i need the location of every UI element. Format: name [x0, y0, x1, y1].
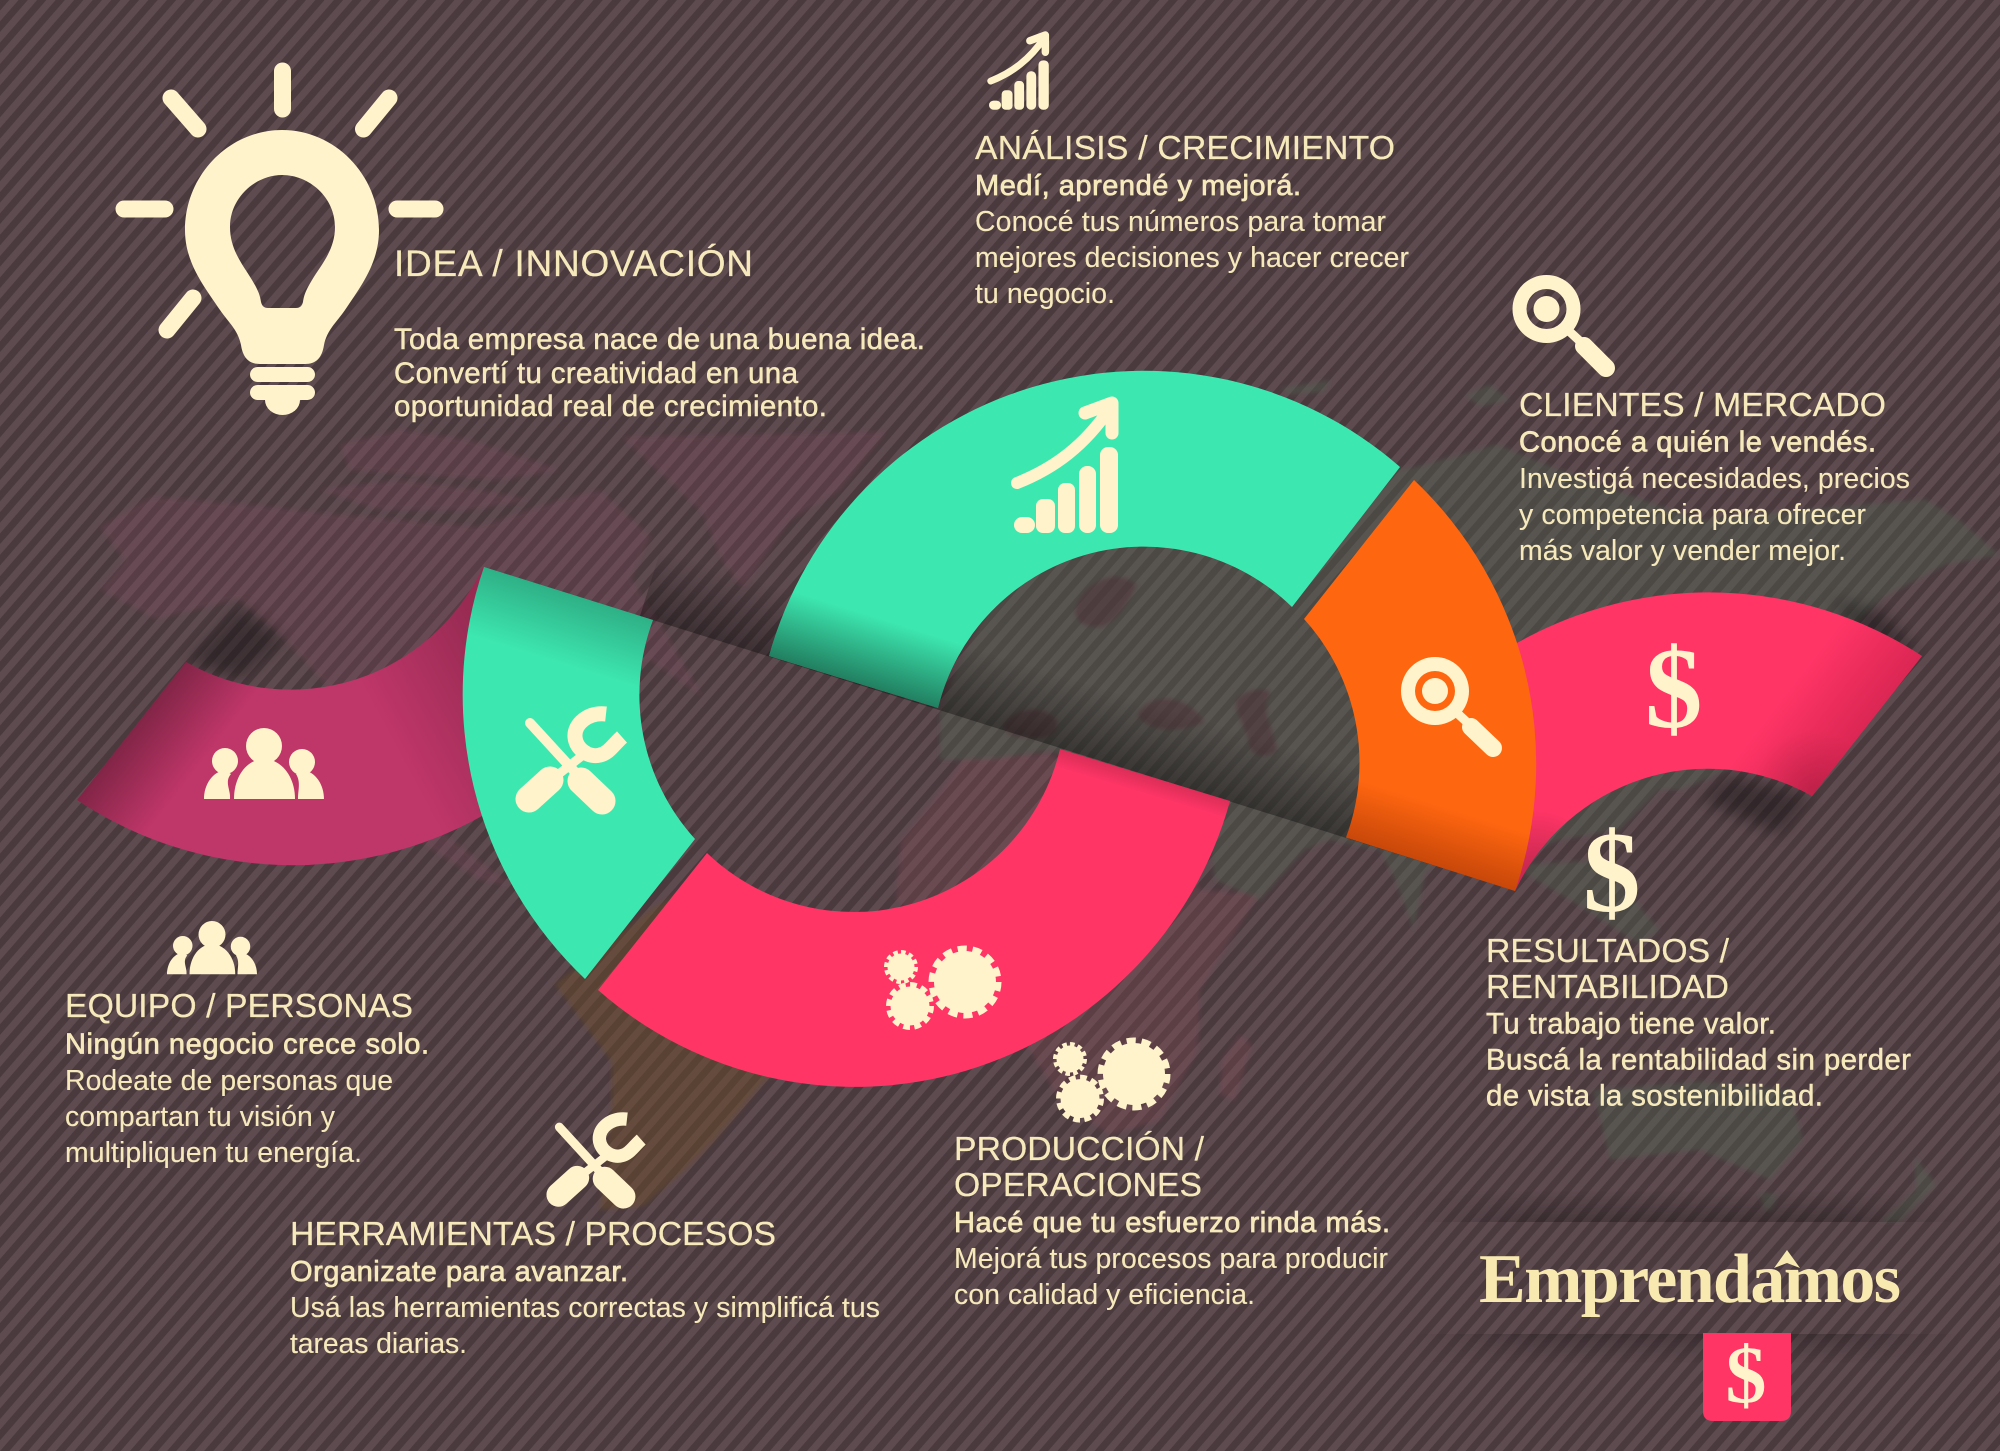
panel: clientes: [1512, 275, 1910, 567]
tag: red dollar: [1703, 1329, 1791, 1421]
tag: red dollar: $: [1726, 1329, 1766, 1420]
icon: gears small: [1055, 1041, 1167, 1120]
panel: analisis: [975, 35, 1409, 310]
icon: people on magenta: [204, 728, 324, 799]
ring segment: green top: [769, 371, 1400, 708]
text: herramientas body: tareas diarias.: [290, 1328, 467, 1360]
text: clientes body: [1519, 426, 1910, 567]
text: herramientas body: [290, 1256, 880, 1360]
shadow above fold line: [640, 549, 1536, 891]
text: idea body: Toda empresa nace de una buena idea.: [394, 323, 925, 356]
heading: produccion: [954, 1130, 1205, 1204]
icon: tools on teal: [529, 714, 622, 801]
text: clientes body: y competencia para ofrecer: [1519, 499, 1866, 531]
text: clientes body: Investigá necesidades, precios: [1519, 463, 1910, 495]
heading: analisis: ANÁLISIS / CRECIMIENTO: [975, 129, 1395, 167]
map: inland seas: [1003, 577, 1276, 756]
icon: magnifier on orange: [1401, 657, 1493, 748]
map: africa: [896, 754, 1258, 1135]
text: resultados body: Buscá la rentabilidad sin perder: [1486, 1044, 1911, 1076]
ring segment: orange right: [1304, 480, 1536, 891]
text: equipo body: [65, 1028, 429, 1169]
ribbon shadows: [186, 600, 1922, 835]
text: produccion body: Mejorá tus procesos para producir: [954, 1243, 1388, 1275]
panel: idea: [124, 71, 925, 423]
map: eurasia: [940, 380, 2000, 1222]
heading: produccion: PRODUCCIÓN /: [954, 1130, 1205, 1168]
heading: resultados: RENTABILIDAD: [1486, 968, 1729, 1006]
icon: growth chart on green: [1014, 403, 1118, 533]
text: equipo body: Rodeate de personas que: [65, 1065, 393, 1097]
heading: resultados: RESULTADOS /: [1486, 932, 1730, 970]
text: clientes body: más valor y vender mejor.: [1519, 535, 1846, 567]
ribbon: red right: [1515, 592, 1922, 891]
banner: emprendamos: [1457, 1201, 1918, 1421]
heading: produccion: OPERACIONES: [954, 1166, 1202, 1204]
text: analisis body: tu negocio.: [975, 278, 1115, 310]
text: produccion body: con calidad y eficiencia.: [954, 1279, 1255, 1311]
heading: herramientas: HERRAMIENTAS / PROCESOS: [290, 1215, 776, 1253]
panel: resultados: [1486, 809, 1911, 1112]
text: analisis body: Medí, aprendé y mejorá.: [975, 170, 1301, 202]
heading: equipo: EQUIPO / PERSONAS: [65, 987, 413, 1025]
text: analisis body: [975, 170, 1409, 310]
heading: resultados: [1486, 932, 1730, 1006]
logo accent: [1774, 1250, 1800, 1268]
text: produccion body: [954, 1207, 1390, 1311]
icon: magnifier small: [1512, 275, 1606, 368]
ring segment: red bottom: [598, 749, 1230, 1087]
heading: idea: IDEA / INNOVACIÓN: [394, 243, 753, 284]
logo wordmark: Emprendamos: [1479, 1241, 1901, 1318]
text: equipo body: Ningún negocio crece solo.: [65, 1028, 429, 1060]
panel: equipo: [65, 921, 429, 1169]
panel: herramientas: [290, 1119, 880, 1360]
map: north america: [100, 430, 886, 885]
text: produccion body: Hacé que tu esfuerzo rinda más.: [954, 1207, 1390, 1239]
text: equipo body: multipliquen tu energía.: [65, 1137, 362, 1169]
icon: tools small: [558, 1119, 641, 1197]
heading: clientes: CLIENTES / MERCADO: [1519, 386, 1886, 424]
map: south america: [555, 880, 800, 1210]
text: analisis body: mejores decisiones y hacer crecer: [975, 242, 1409, 274]
ribbon: magenta left: [77, 567, 483, 865]
text: clientes body: Conocé a quién le vendés.: [1519, 426, 1876, 458]
icon: people small: [167, 921, 257, 974]
text: equipo body: compartan tu visión y: [65, 1101, 336, 1133]
world map: [100, 380, 2000, 1222]
icon: dollar on red ribbon: $: [1645, 625, 1702, 752]
icon: light bulb: [124, 71, 435, 415]
text: herramientas body: Organizate para avanzar.: [290, 1256, 628, 1288]
text: resultados body: Tu trabajo tiene valor.: [1486, 1008, 1776, 1040]
text: analisis body: Conocé tus números para tomar: [975, 206, 1386, 238]
text: resultados body: de vista la sostenibilidad.: [1486, 1080, 1823, 1112]
text: idea body: [394, 323, 925, 423]
icon: growth chart small: [989, 35, 1049, 110]
icon: dollar: $: [1583, 809, 1640, 936]
panel: produccion: [954, 1041, 1390, 1311]
text: idea body: oportunidad real de crecimiento.: [394, 390, 827, 423]
text: resultados body: [1486, 1008, 1911, 1112]
text: idea body: Convertí tu creatividad en una: [394, 357, 799, 390]
text: herramientas body: Usá las herramientas correctas y simplificá tus: [290, 1292, 880, 1324]
icon: gears on red: [886, 949, 998, 1028]
ring segment: teal left: [463, 567, 695, 979]
